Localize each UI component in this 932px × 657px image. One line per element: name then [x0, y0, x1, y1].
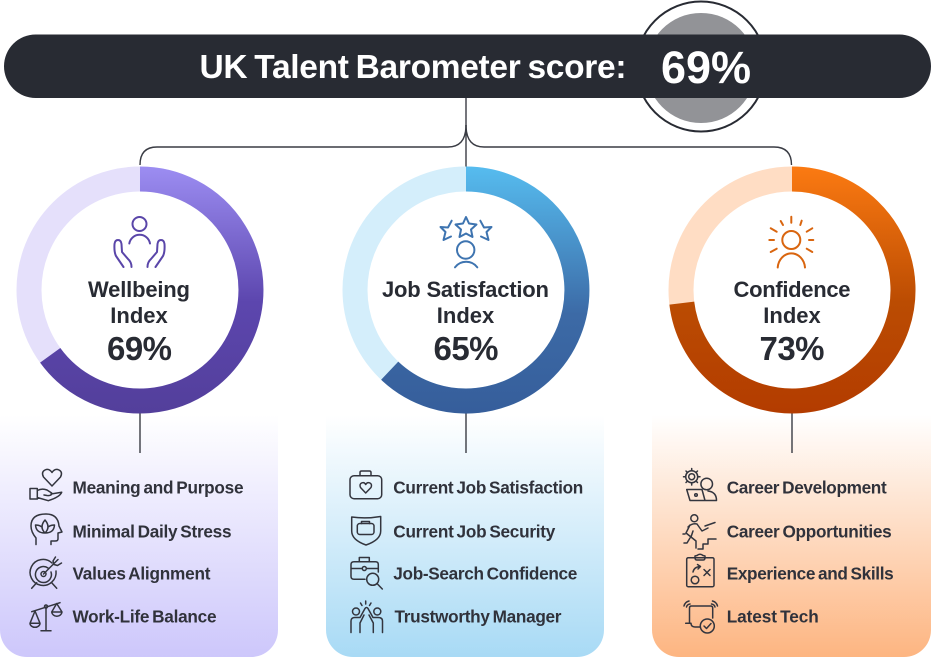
- panel: job satisfaction background: [326, 415, 604, 657]
- text: experience and skills: Experience and Skills: [727, 563, 894, 583]
- label: confidence index: [734, 277, 850, 367]
- list: wellbeing drivers: [30, 469, 244, 631]
- icon: person climbing stairs: [683, 515, 716, 549]
- overall score: 69%: [661, 42, 751, 93]
- label: job satisfaction index: Index: [437, 303, 495, 328]
- label: wellbeing index: [88, 277, 190, 367]
- text: job-search confidence: Job-Search Confidence: [393, 563, 577, 583]
- label: confidence index: Confidence: [734, 277, 850, 302]
- icon: laptop with check: [684, 601, 718, 633]
- donut: job satisfaction 65%: [355, 179, 577, 401]
- label: job satisfaction index: Job Satisfaction: [382, 277, 549, 302]
- icon: briefcase with heart: [350, 471, 382, 499]
- score circle: [636, 2, 766, 132]
- text: career opportunities: Career Opportunities: [727, 521, 892, 541]
- label: wellbeing index: 69%: [107, 330, 172, 367]
- title bar: [4, 34, 931, 98]
- title: UK Talent Barometer score:: [200, 49, 626, 86]
- donut: confidence 73%: [681, 179, 903, 401]
- donut: wellbeing 69%: [29, 179, 251, 401]
- icon: briefcase with magnifier: [351, 558, 382, 589]
- text: current job satisfaction: Current Job Satisfaction: [393, 478, 583, 498]
- icon: head with lotus: [31, 514, 62, 544]
- panel: confidence background: [652, 415, 931, 657]
- list: job satisfaction drivers: [350, 471, 583, 632]
- text: meaning and purpose: Meaning and Purpose: [72, 478, 244, 498]
- label: confidence index: Index: [763, 303, 821, 328]
- connector lines: [140, 98, 792, 453]
- text: minimal daily stress: Minimal Daily Stress: [72, 521, 232, 541]
- icon: gear and person at laptop: [684, 468, 716, 500]
- icon: person in hands: [114, 217, 165, 267]
- icon: person with sun rays: [769, 217, 813, 268]
- label: wellbeing index: Index: [110, 303, 168, 328]
- icon: shield with briefcase: [352, 516, 381, 545]
- text: current job security: Current Job Security: [393, 521, 556, 541]
- text: career development: Career Development: [727, 478, 887, 498]
- icon: balance scale: [30, 603, 62, 631]
- text: work-life balance: Work-Life Balance: [72, 607, 216, 627]
- icon: high five: [351, 601, 382, 632]
- label: job satisfaction index: [382, 277, 549, 367]
- icon: person with stars: [440, 217, 492, 267]
- text: values alignment: Values Alignment: [72, 563, 211, 583]
- icon: heart in hand: [30, 469, 62, 501]
- panel: wellbeing background: [0, 415, 278, 657]
- text: latest tech: Latest Tech: [727, 607, 819, 627]
- label: wellbeing index: Wellbeing: [88, 277, 190, 302]
- text: trustworthy manager: Trustworthy Manager: [394, 607, 562, 627]
- icon: target with arrow: [30, 557, 62, 588]
- icon: clipboard with strategy: [687, 554, 714, 587]
- list: confidence drivers: [683, 468, 894, 633]
- label: job satisfaction index: 65%: [434, 330, 498, 367]
- label: confidence index: 73%: [760, 330, 824, 367]
